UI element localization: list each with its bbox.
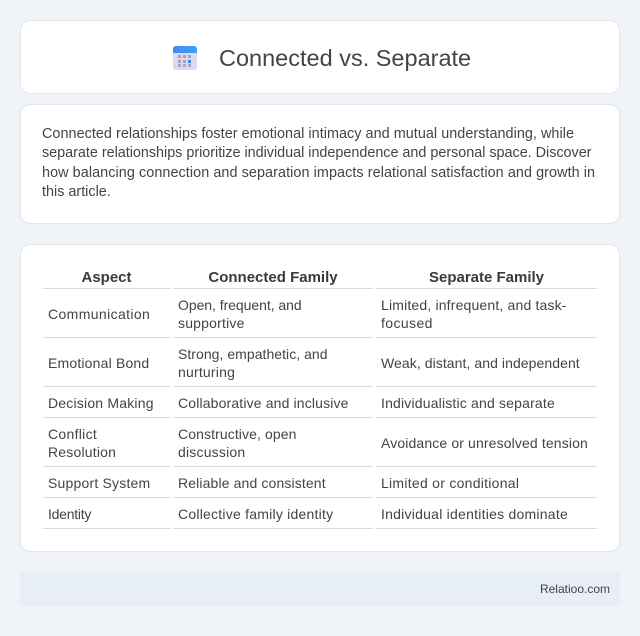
table header: Aspect xyxy=(81,269,132,286)
row: emotional bond xyxy=(43,346,597,387)
row: conflict resolution: Constructive, open xyxy=(178,426,297,442)
intro line 3: how balancing connection and separation impacts relational satisfaction and growth in xyxy=(42,165,595,181)
row: emotional bond: nurturing xyxy=(178,364,235,380)
icon: calendar xyxy=(173,46,197,70)
row: conflict resolution: Conflict xyxy=(48,426,97,442)
row: identity: Individual identities dominate xyxy=(381,506,568,522)
header card xyxy=(20,20,620,94)
row: conflict resolution xyxy=(43,426,597,467)
intro line 2: separate relationships prioritize individual independence and personal space. Discover xyxy=(42,145,591,161)
comparison table panel xyxy=(20,244,620,552)
row: conflict resolution: Resolution xyxy=(48,444,116,460)
table header xyxy=(43,269,597,289)
footer credit: Relatioo.com xyxy=(540,582,610,596)
row: identity xyxy=(43,506,597,529)
row: emotional bond: Strong, empathetic, and xyxy=(178,346,328,362)
row: communication: focused xyxy=(381,315,433,331)
table header: Separate Family xyxy=(429,269,544,286)
row: decision making: Collaborative and inclusive xyxy=(178,395,349,411)
row: identity: Collective family identity xyxy=(178,506,333,522)
table header: Connected Family xyxy=(208,269,338,286)
row: decision making xyxy=(43,395,597,418)
title: Connected vs. Separate xyxy=(219,45,471,71)
row: identity: Identity xyxy=(48,506,91,522)
row: support system xyxy=(43,475,597,498)
row: support system: Reliable and consistent xyxy=(178,475,326,491)
row: decision making: Individualistic and separate xyxy=(381,395,555,411)
row: communication xyxy=(43,297,597,338)
row: communication: Open, frequent, and xyxy=(178,297,302,313)
intro text panel xyxy=(20,104,620,224)
row: decision making: Decision Making xyxy=(48,395,154,411)
intro line 1: Connected relationships foster emotional intimacy and mutual understanding, while xyxy=(42,126,574,142)
row: communication: Limited, infrequent, and task- xyxy=(381,297,567,313)
row: support system: Limited or conditional xyxy=(381,475,519,491)
row: support system: Support System xyxy=(48,475,150,491)
row: emotional bond: Emotional Bond xyxy=(48,355,149,371)
row: emotional bond: Weak, distant, and independent xyxy=(381,355,580,371)
row: conflict resolution: Avoidance or unresolved tension xyxy=(381,435,588,451)
row: communication: Communication xyxy=(48,306,150,322)
row: conflict resolution: discussion xyxy=(178,444,245,460)
row: communication: supportive xyxy=(178,315,245,331)
footer bar xyxy=(20,572,620,606)
intro line 4: this article. xyxy=(42,184,111,200)
